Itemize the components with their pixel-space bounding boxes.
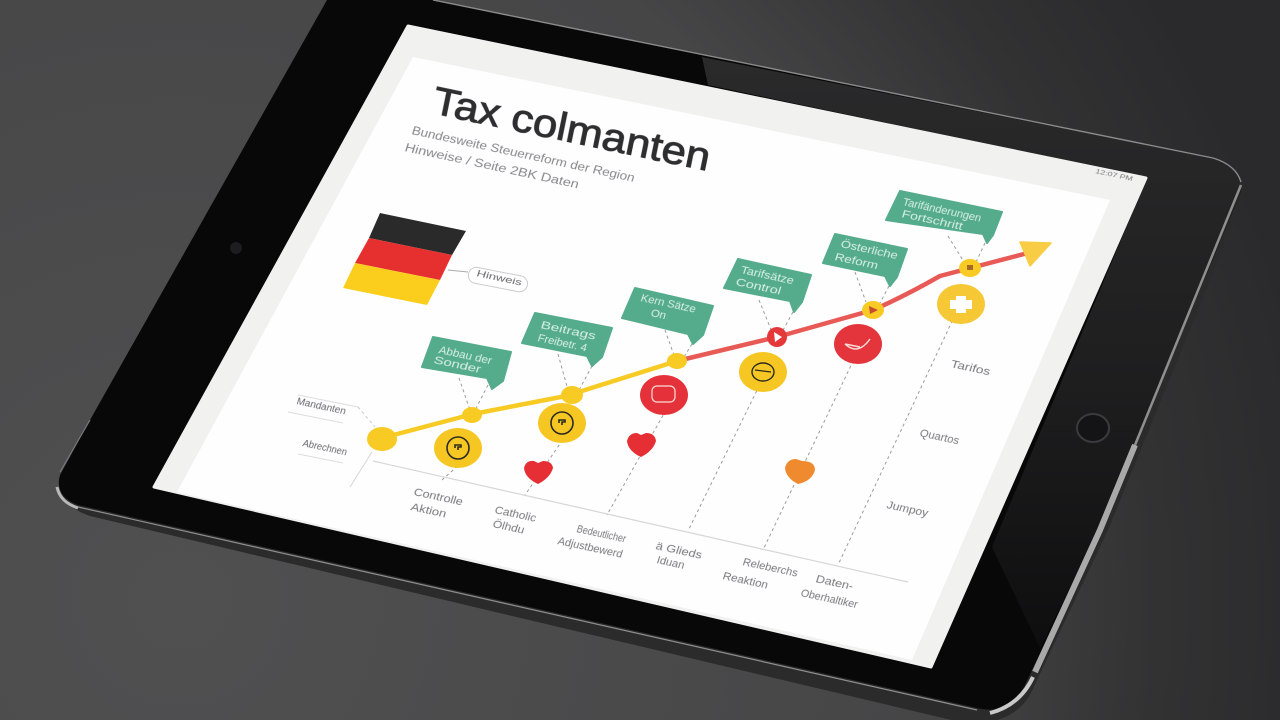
growth line: yellow section <box>382 361 677 438</box>
flag callout label <box>448 266 529 293</box>
screen margin <box>154 26 1146 667</box>
growth line: red section <box>677 254 1024 361</box>
heart 1 <box>524 461 553 484</box>
silver top edge <box>433 0 1241 182</box>
callout 3 <box>622 288 713 344</box>
left labels <box>288 395 358 463</box>
callout 4 <box>724 259 811 312</box>
silver right edge upper <box>1135 185 1241 445</box>
callout 2: Beitrags <box>539 319 598 343</box>
right labels <box>885 358 992 520</box>
bottom labels: Reaktion <box>721 570 770 592</box>
silver right edge lower <box>1035 445 1135 672</box>
callout 1: Abbau der <box>437 344 494 367</box>
x axis <box>373 461 908 582</box>
icon circle 6 <box>937 284 985 324</box>
inner white panel <box>177 57 1110 660</box>
bottom labels: Ölhdu <box>491 518 526 537</box>
bottom labels <box>409 486 859 611</box>
arrowhead <box>1020 242 1051 266</box>
callout 3: Kern Sätze <box>639 292 697 316</box>
bottom labels: Releberchs <box>741 556 800 580</box>
start node <box>367 427 397 451</box>
bottom labels: Iduan <box>655 554 686 572</box>
status text: 12:07 PM <box>1094 169 1133 183</box>
left labels: Mandanten <box>295 396 347 417</box>
callout 4: Tarifsätze <box>739 264 795 287</box>
German flag <box>343 213 466 305</box>
bottom labels: Adjustbewerd <box>556 535 624 561</box>
callout 5: Reform <box>833 251 880 272</box>
subtitle text block: Hinweise / Seite 2BK Daten <box>403 141 581 191</box>
home button right <box>1077 414 1109 442</box>
subtitle text block: Bundesweite Steuerreform der Region <box>410 124 637 185</box>
bottom labels: Daten- <box>814 573 855 593</box>
callout 6: Fortschritt <box>900 208 965 233</box>
bottom labels: ä Glieds <box>654 540 704 562</box>
callout 6 <box>886 191 1002 243</box>
right labels: Tarifos <box>949 358 992 378</box>
callout 3: On <box>649 307 668 322</box>
callout 2: Freibetr. 4 <box>536 332 589 354</box>
callout 2 <box>522 313 612 366</box>
silver bottom edge <box>78 507 977 710</box>
camera lens left <box>230 242 242 254</box>
icon circle 1 <box>434 428 482 468</box>
icon circle 3 <box>640 375 688 415</box>
tablet side band <box>60 175 1247 720</box>
bottom labels: Oberhaltiker <box>799 587 859 611</box>
bottom labels: Catholic <box>493 504 538 525</box>
callout 5 <box>823 234 907 286</box>
callout 5: Österliche <box>839 238 899 262</box>
orange marker <box>785 459 815 484</box>
bottom labels: Bedeutlicher <box>575 523 628 545</box>
right labels: Jumpoy <box>885 499 930 520</box>
chrome corner highlights <box>990 677 1033 713</box>
dashed connectors <box>350 236 985 565</box>
left labels: Abrechnen <box>301 438 348 458</box>
bezel glare top right <box>702 57 1241 648</box>
callout 6: Tarifänderungen <box>901 196 983 225</box>
callout 4: Control <box>734 276 783 298</box>
right labels: Quartos <box>918 427 961 447</box>
icon circle 5 <box>834 324 882 364</box>
title: Tax colmanten <box>429 80 714 180</box>
bottom labels: Aktion <box>409 501 448 520</box>
callout 1 <box>422 337 511 389</box>
icon circle 2 <box>538 403 586 443</box>
callout 1: Sonder <box>432 354 483 376</box>
bottom labels: Controlle <box>412 486 464 508</box>
line markers <box>462 259 981 423</box>
icon circle 4 <box>739 352 787 392</box>
flag callout label: Hinweis <box>475 268 524 289</box>
heart 2 <box>627 433 656 457</box>
